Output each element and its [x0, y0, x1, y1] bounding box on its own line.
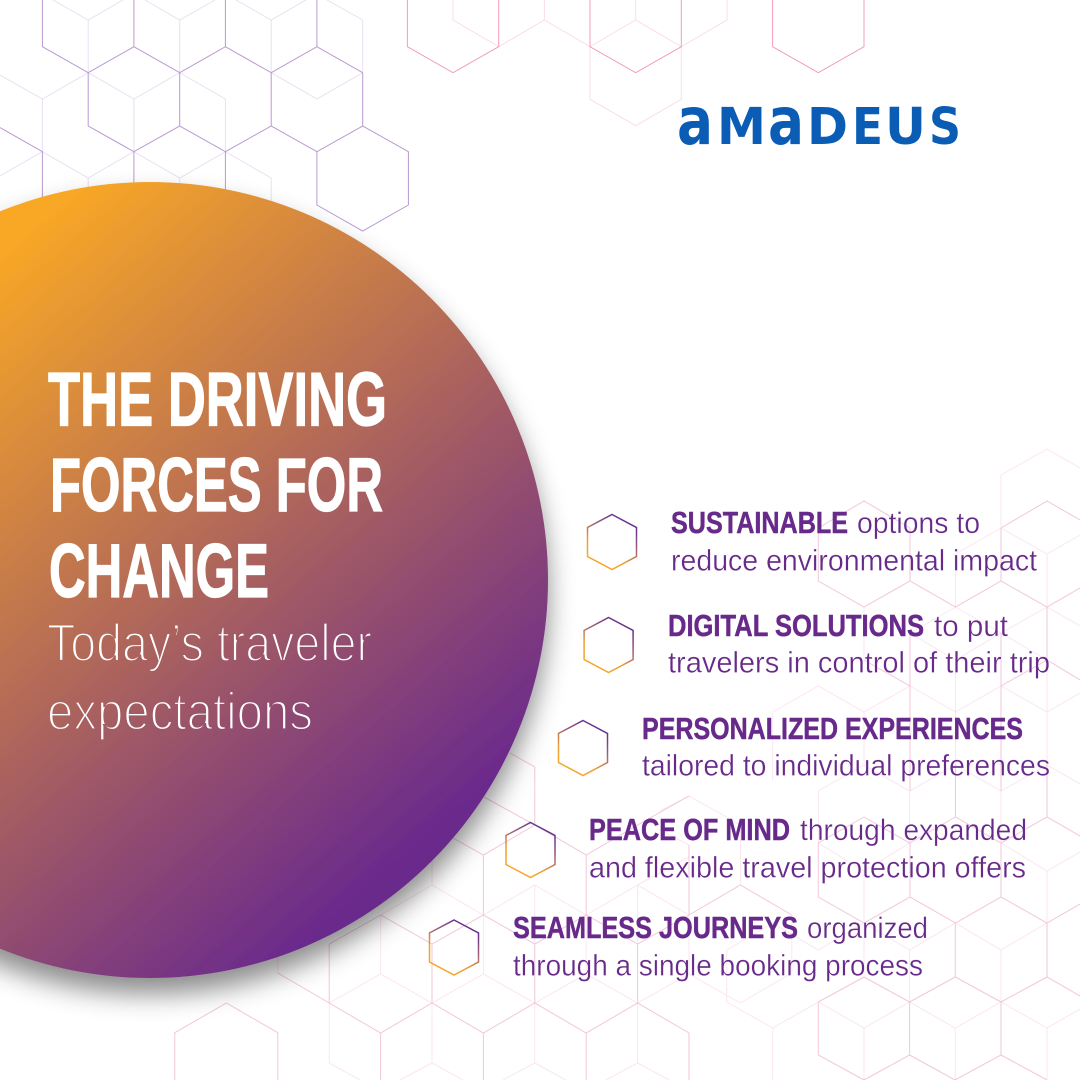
text: sustainable: reduce environmental impact: [671, 544, 1038, 578]
list item: sustainable: [588, 505, 1038, 578]
logo: Amadeus wordmark: a: [768, 83, 804, 160]
text: digital solutions: [668, 608, 1050, 680]
logo: Amadeus wordmark: M: [717, 98, 766, 157]
text: digital solutions: DIGITAL SOLUTIONS: [668, 608, 924, 643]
list item: peace of mind: [506, 812, 1027, 884]
background hexagons: pink top: [407, 0, 864, 126]
icon: hexagon: [588, 514, 636, 570]
subtitle: expectations: [47, 682, 313, 742]
list item: digital solutions: [584, 608, 1050, 680]
text: seamless journeys: organized: [807, 912, 928, 945]
text: digital solutions: travelers in control of their trip: [668, 646, 1050, 680]
text: seamless journeys: [513, 910, 928, 982]
background hexagons: purple top left: [0, 0, 408, 231]
title: [48, 358, 387, 614]
text: seamless journeys: through a single booking process: [513, 950, 923, 982]
gradient circle: [0, 182, 548, 978]
text: digital solutions: to put: [934, 610, 1009, 643]
logo: Amadeus wordmark: S: [929, 98, 961, 157]
subtitle: [47, 614, 372, 742]
logo: Amadeus wordmark: U: [885, 98, 926, 157]
title: THE DRIVING: [48, 358, 387, 443]
text: sustainable: SUSTAINABLE: [671, 505, 848, 540]
text: peace of mind: through expanded: [800, 814, 1027, 847]
text: peace of mind: PEACE OF MIND: [589, 812, 790, 847]
icon: hexagon: [558, 720, 608, 776]
logo: Amadeus wordmark: D: [807, 98, 848, 157]
icon: hexagon: [584, 618, 633, 672]
text: personalized experiences: [642, 711, 1050, 782]
subtitle: Today’s traveler: [47, 614, 372, 673]
title: CHANGE: [49, 529, 269, 614]
text: seamless journeys: SEAMLESS JOURNEYS: [513, 910, 798, 945]
list item: personalized experiences: [558, 711, 1050, 782]
logo: Amadeus wordmark: [677, 83, 961, 160]
text: peace of mind: and flexible travel protection offers: [589, 852, 1026, 884]
text: sustainable: options to: [857, 507, 980, 540]
logo: Amadeus wordmark: a: [677, 83, 713, 160]
text: sustainable: [671, 505, 1038, 578]
title: FORCES FOR: [50, 443, 383, 528]
icon: hexagon: [506, 822, 555, 878]
background hexagons: pink bottom: [175, 449, 1080, 1080]
logo: Amadeus wordmark: E: [852, 98, 883, 157]
list item: seamless journeys: [430, 910, 928, 982]
text: peace of mind: [589, 812, 1027, 884]
icon: hexagon: [430, 920, 478, 975]
text: personalized experiences: tailored to individual preferences: [642, 750, 1050, 782]
